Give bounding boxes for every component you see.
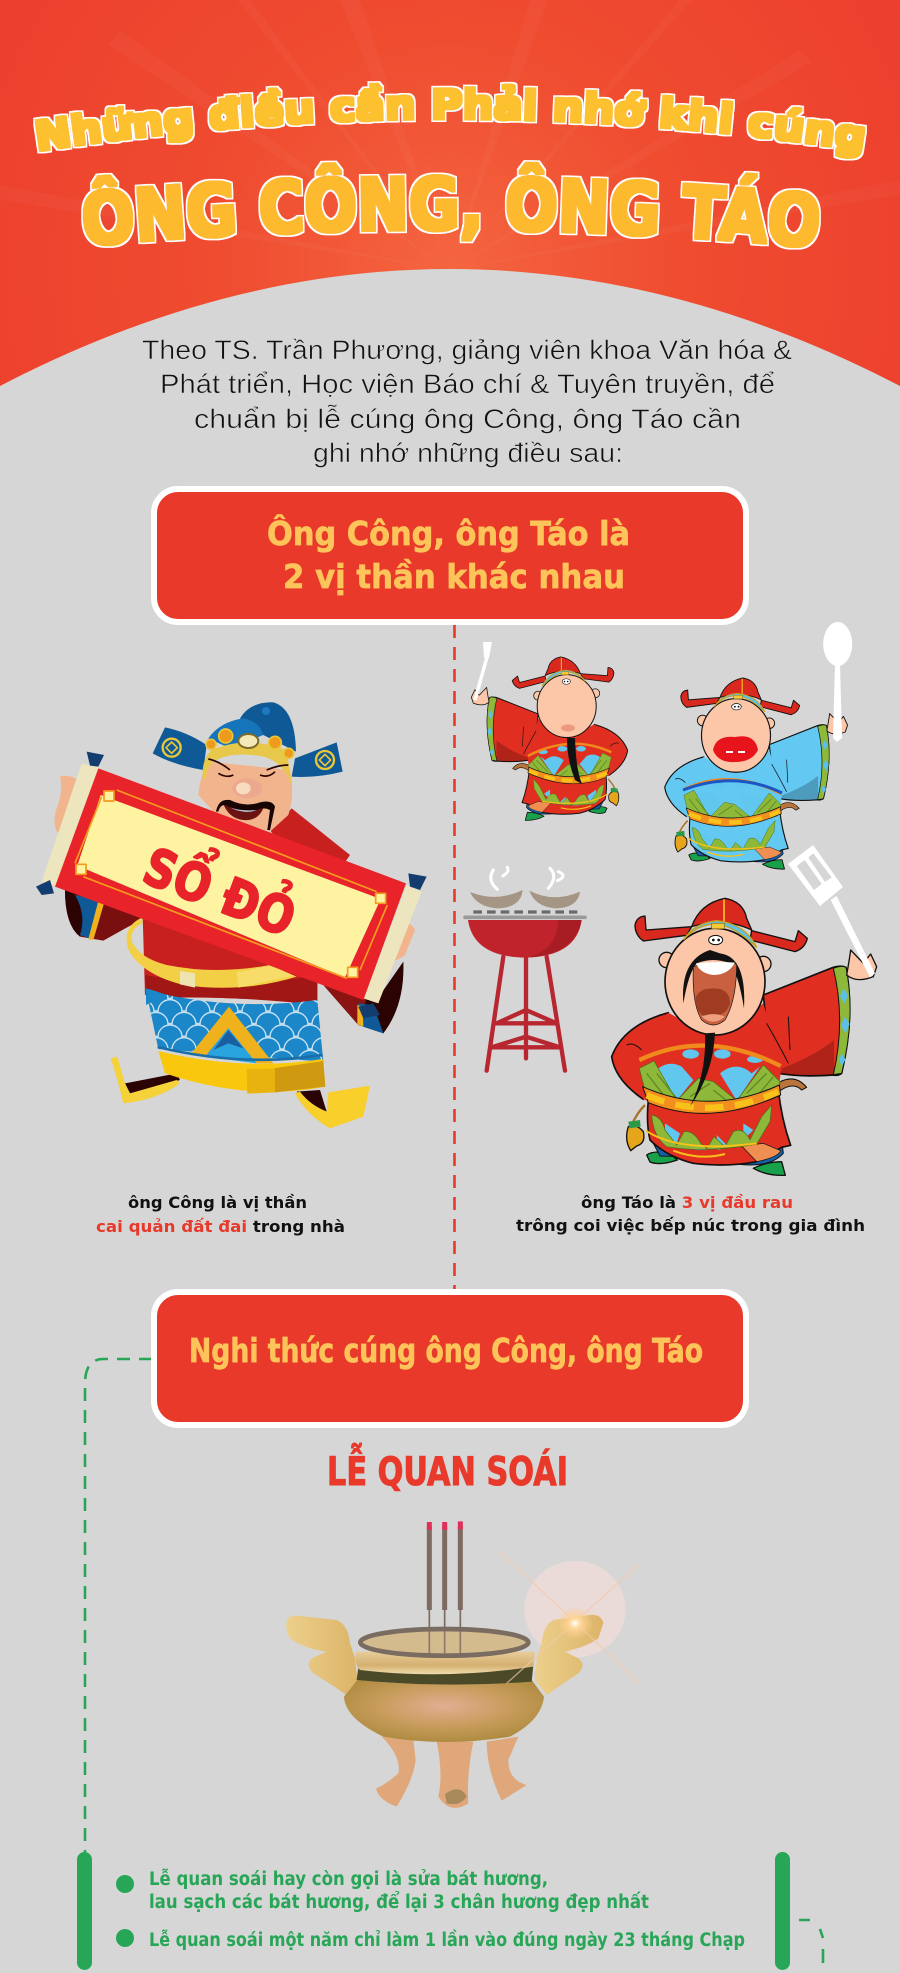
illustration: incense burner — [286, 1521, 640, 1808]
caption: ông Công: ông Công là vị thần — [128, 1193, 307, 1212]
illustration: blue ông Táo with spoon — [665, 622, 852, 869]
intro text: chuẩn bị lễ cúng ông Công, ông Táo cần — [194, 403, 741, 434]
section box 1 — [154, 489, 746, 622]
heading: Lễ quan soái: LỄ QUAN SOÁI — [327, 1443, 568, 1495]
title line 1 on arc: Những điều cần Phải nhớ khi cúng — [33, 81, 867, 160]
green dashed connector left — [85, 1359, 152, 1852]
title line 2 on arc: ÔNG CÔNG, ÔNG TÁO — [81, 160, 821, 250]
header red banner with sunburst — [0, 0, 900, 400]
caption: ông Táo: ông Táo là 3 vị đầu rau — [581, 1193, 793, 1212]
caption: ông Táo — [516, 1193, 865, 1235]
illustration: red ông Táo with fork — [471, 642, 628, 820]
section box 1: Ông Công, ông Táo là — [267, 513, 630, 553]
section box 2: Nghi thức cúng ông Công, ông Táo — [189, 1331, 703, 1370]
section box 2 — [154, 1292, 746, 1425]
section box 1: 2 vị thần khác nhau — [283, 557, 625, 596]
bullet list: Lễ quan soái một năm chỉ làm 1 lần vào đúng ngày 23 tháng Chạp — [149, 1929, 745, 1951]
intro text: Theo TS. Trần Phương, giảng viên khoa Văn hóa & — [142, 335, 792, 365]
caption: ông Công: cai quản đất đai trong nhà — [96, 1217, 345, 1236]
bullet list: Lễ quan soái hay còn gọi là sửa bát hương, — [149, 1868, 548, 1890]
bullet list: lau sạch các bát hương, để lại 3 chân hương đẹp nhất — [149, 1891, 649, 1913]
intro text — [142, 335, 792, 468]
red dashed centre connector — [453, 625, 456, 1290]
green bracket bar right — [775, 1852, 790, 1970]
illustration: barbecue grill with sausages — [465, 867, 585, 1071]
illustration: big ông Táo with spatula — [612, 845, 877, 1175]
intro text: Phát triển, Học viện Báo chí & Tuyên truyền, để — [160, 369, 775, 399]
scroll label: SỔ ĐỎ: SỔ ĐỎ — [135, 828, 307, 949]
caption: ông Công — [96, 1193, 345, 1236]
green bracket bar left — [77, 1852, 92, 1970]
caption: ông Táo: trông coi việc bếp núc trong gia đình — [516, 1216, 865, 1235]
green dashed connector right — [799, 1920, 823, 1963]
illustration: ông Công holding scroll — [36, 702, 427, 1128]
bullet list — [116, 1868, 745, 1951]
intro text: ghi nhớ những điều sau: — [313, 438, 623, 468]
